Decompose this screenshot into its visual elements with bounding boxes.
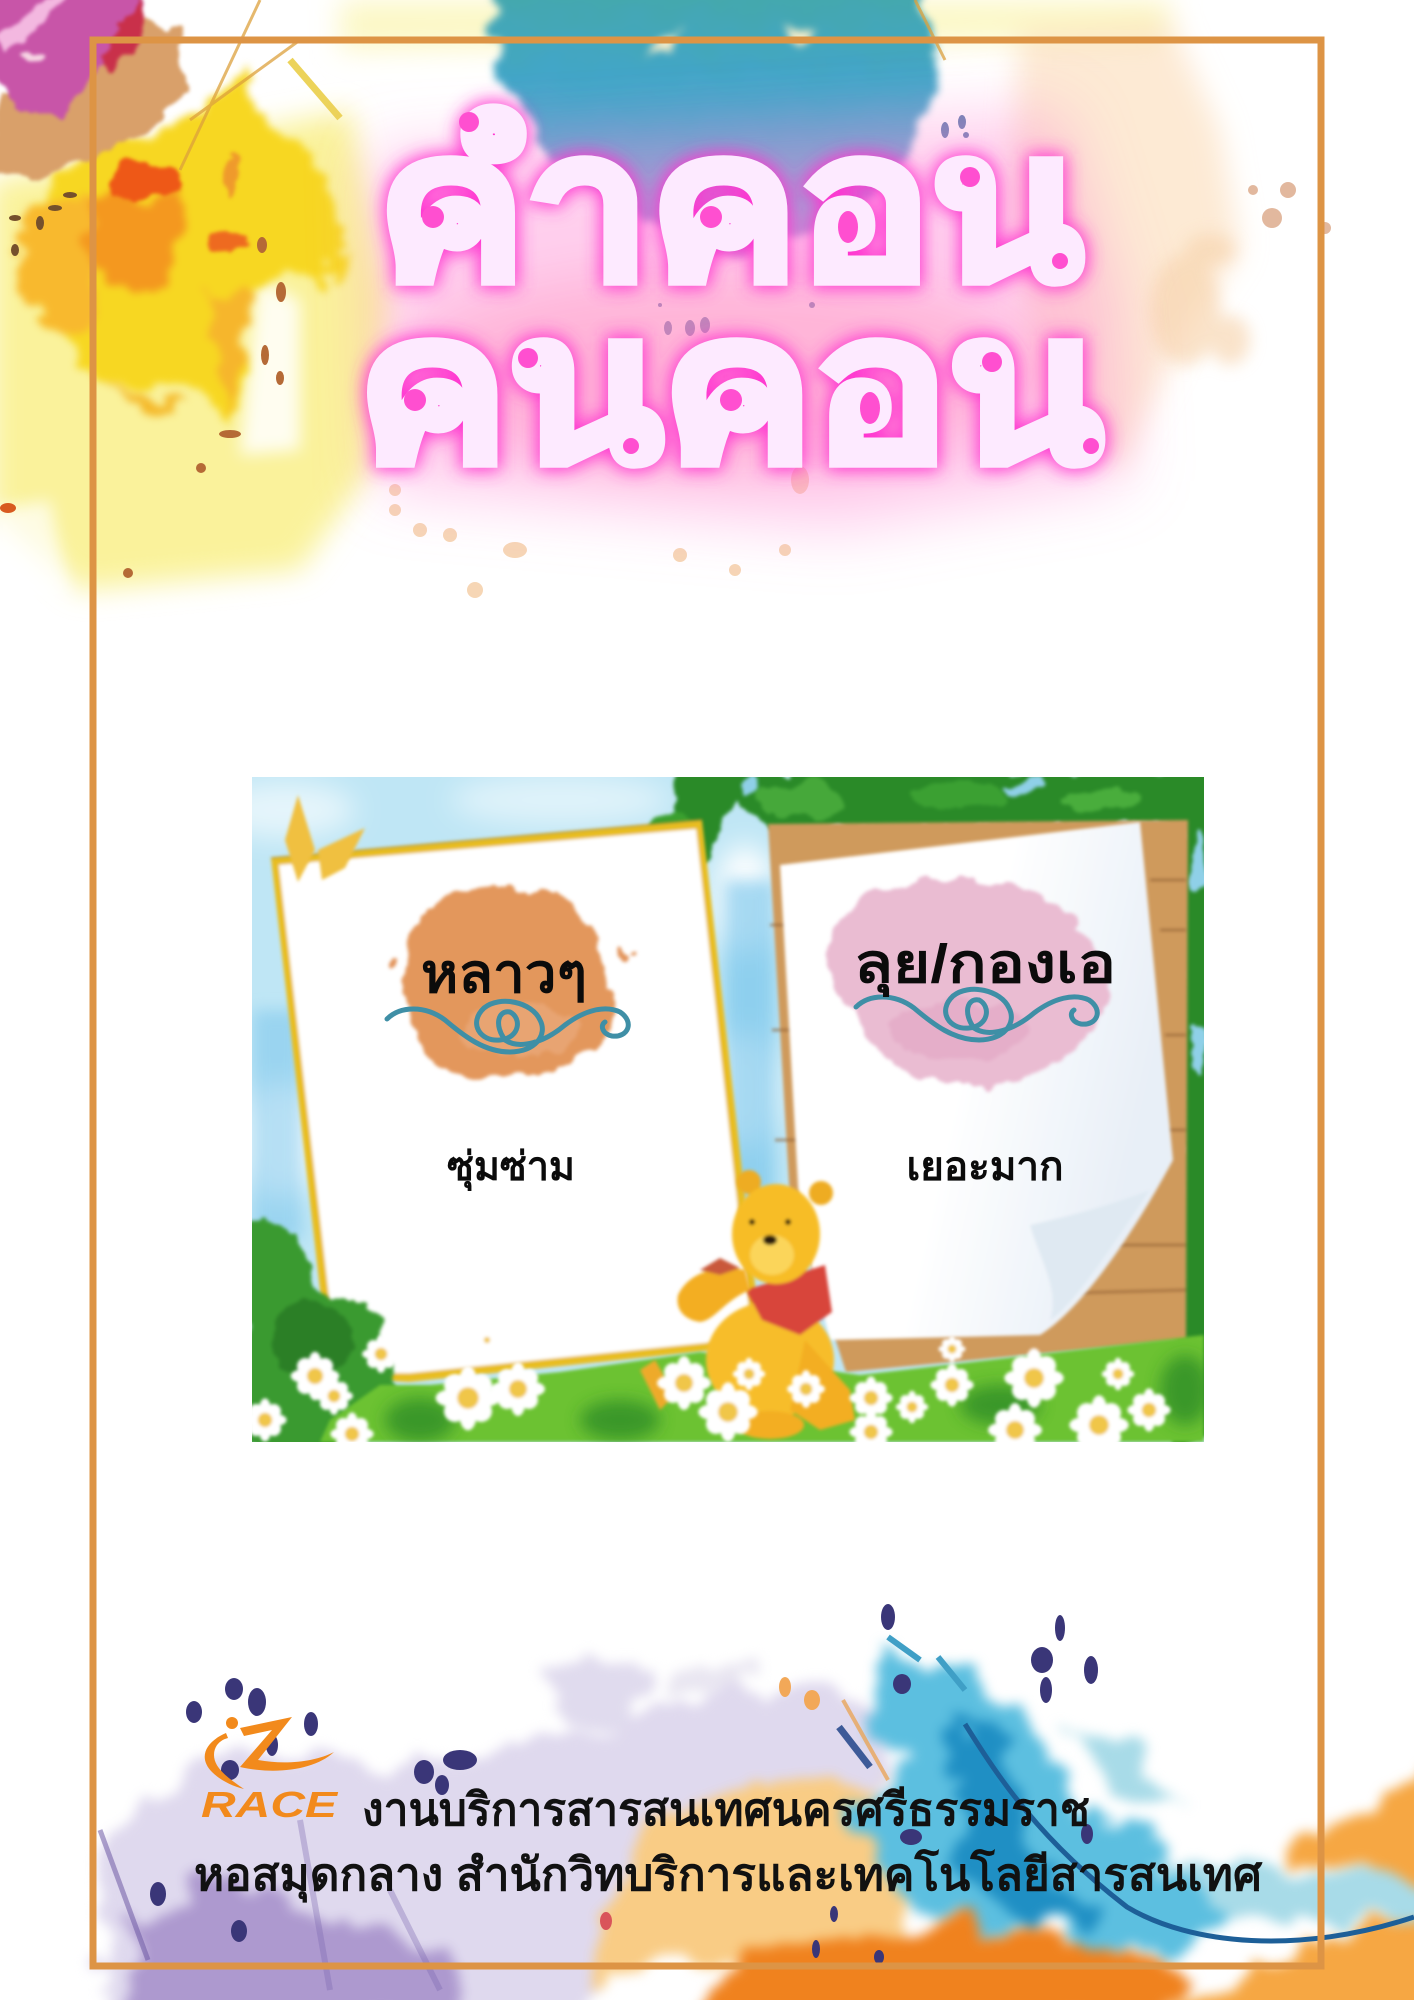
pale wash — [0, 0, 1240, 590]
heading: left word: หลาวๆ — [421, 944, 587, 1004]
sky — [252, 777, 1204, 1442]
watercolor splash: top — [0, 0, 1331, 600]
teal blot — [496, 0, 938, 260]
grass — [320, 1335, 1204, 1442]
tree foliage — [640, 770, 1215, 1440]
white gaps — [0, 280, 300, 600]
pink glow behind title — [370, 110, 1130, 530]
footer text: หอสมุดกลาง สำนักวิทบริการและเทคโนโลยีสารสนเทศ — [194, 1848, 1263, 1903]
footer text: งานบริการสารสนเทศนครศรีธรรมราช — [362, 1784, 1090, 1835]
meaning: right word: เยอะมาก — [906, 1145, 1064, 1189]
title: คนคอน — [358, 275, 1102, 504]
golden frame with white page — [271, 820, 762, 1382]
title: คำคอน — [378, 93, 1082, 322]
yellow body — [20, 60, 345, 430]
daisies — [252, 1334, 1173, 1442]
meaning: left word: ซุ่มซ่าม — [447, 1145, 575, 1192]
logo: RACE: RACE — [201, 1784, 338, 1825]
logo: RACE — [201, 1717, 338, 1825]
dark specks and strokes — [150, 1604, 1098, 1964]
title letter counters — [404, 112, 1099, 454]
title: คนคอน — [358, 275, 1102, 504]
heading: right word: ลุย/กองเอ — [854, 934, 1116, 998]
magenta corner — [0, 0, 190, 178]
watercolor blob: orange — [386, 886, 638, 1076]
butterfly — [285, 795, 365, 882]
left bush — [245, 1218, 395, 1450]
picture panel: Pooh scene — [215, 770, 1215, 1457]
watercolor splash: bottom — [100, 1604, 1414, 2000]
Winnie the Pooh — [640, 1170, 855, 1439]
watercolor blob: pink — [829, 879, 1108, 1085]
ornament: teal swirl left — [387, 1001, 628, 1052]
title — [358, 93, 1102, 504]
footer text — [194, 1784, 1263, 1903]
splash strokes and specks — [0, 0, 1331, 598]
ornament: teal swirl right — [856, 989, 1097, 1040]
wooden board — [768, 820, 1188, 1372]
curled paper — [780, 822, 1173, 1340]
title: คำคอน — [378, 93, 1082, 322]
